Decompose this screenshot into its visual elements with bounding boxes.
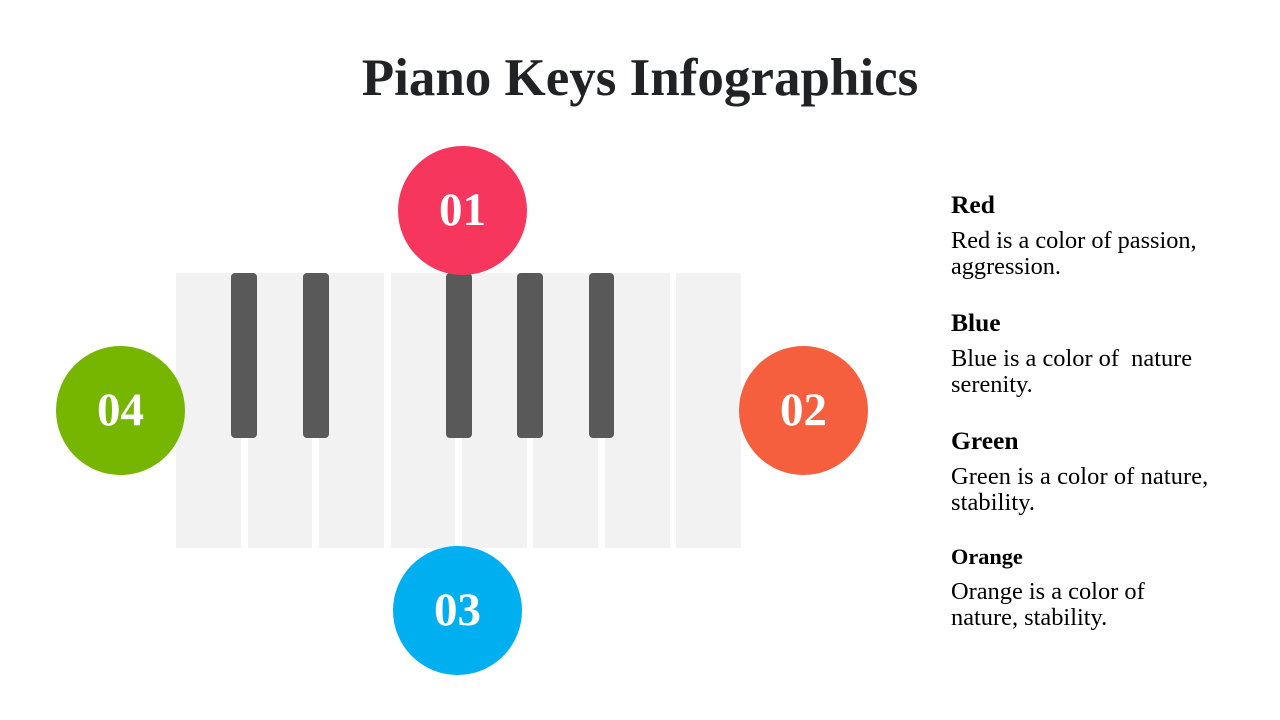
legend: green: Green (951, 426, 1019, 455)
legend: orange: Orange is a color of nature, stability. (951, 578, 1145, 631)
legend: orange: Orange (951, 544, 1023, 569)
circle 01 (398, 146, 527, 275)
circle 03 (393, 546, 522, 675)
legend: red: Red is a color of passion, aggression. (951, 227, 1197, 280)
circle 04 (56, 346, 185, 475)
circle 01: 01 (439, 184, 486, 236)
legend: blue: Blue (951, 308, 1001, 337)
legend: blue: Blue is a color of nature serenity. (951, 345, 1192, 398)
title: Piano Keys Infographics (362, 49, 918, 107)
circle 04: 04 (97, 384, 144, 436)
legend: blue (951, 308, 1192, 398)
circle 02 (739, 346, 868, 475)
legend: green: Green is a color of nature, stability. (951, 463, 1208, 516)
legend: red: Red (951, 190, 995, 219)
legend: green (951, 426, 1208, 516)
circle 02: 02 (780, 384, 827, 436)
legend: orange (951, 544, 1145, 631)
circle 03: 03 (434, 584, 481, 636)
legend: red (951, 190, 1197, 280)
